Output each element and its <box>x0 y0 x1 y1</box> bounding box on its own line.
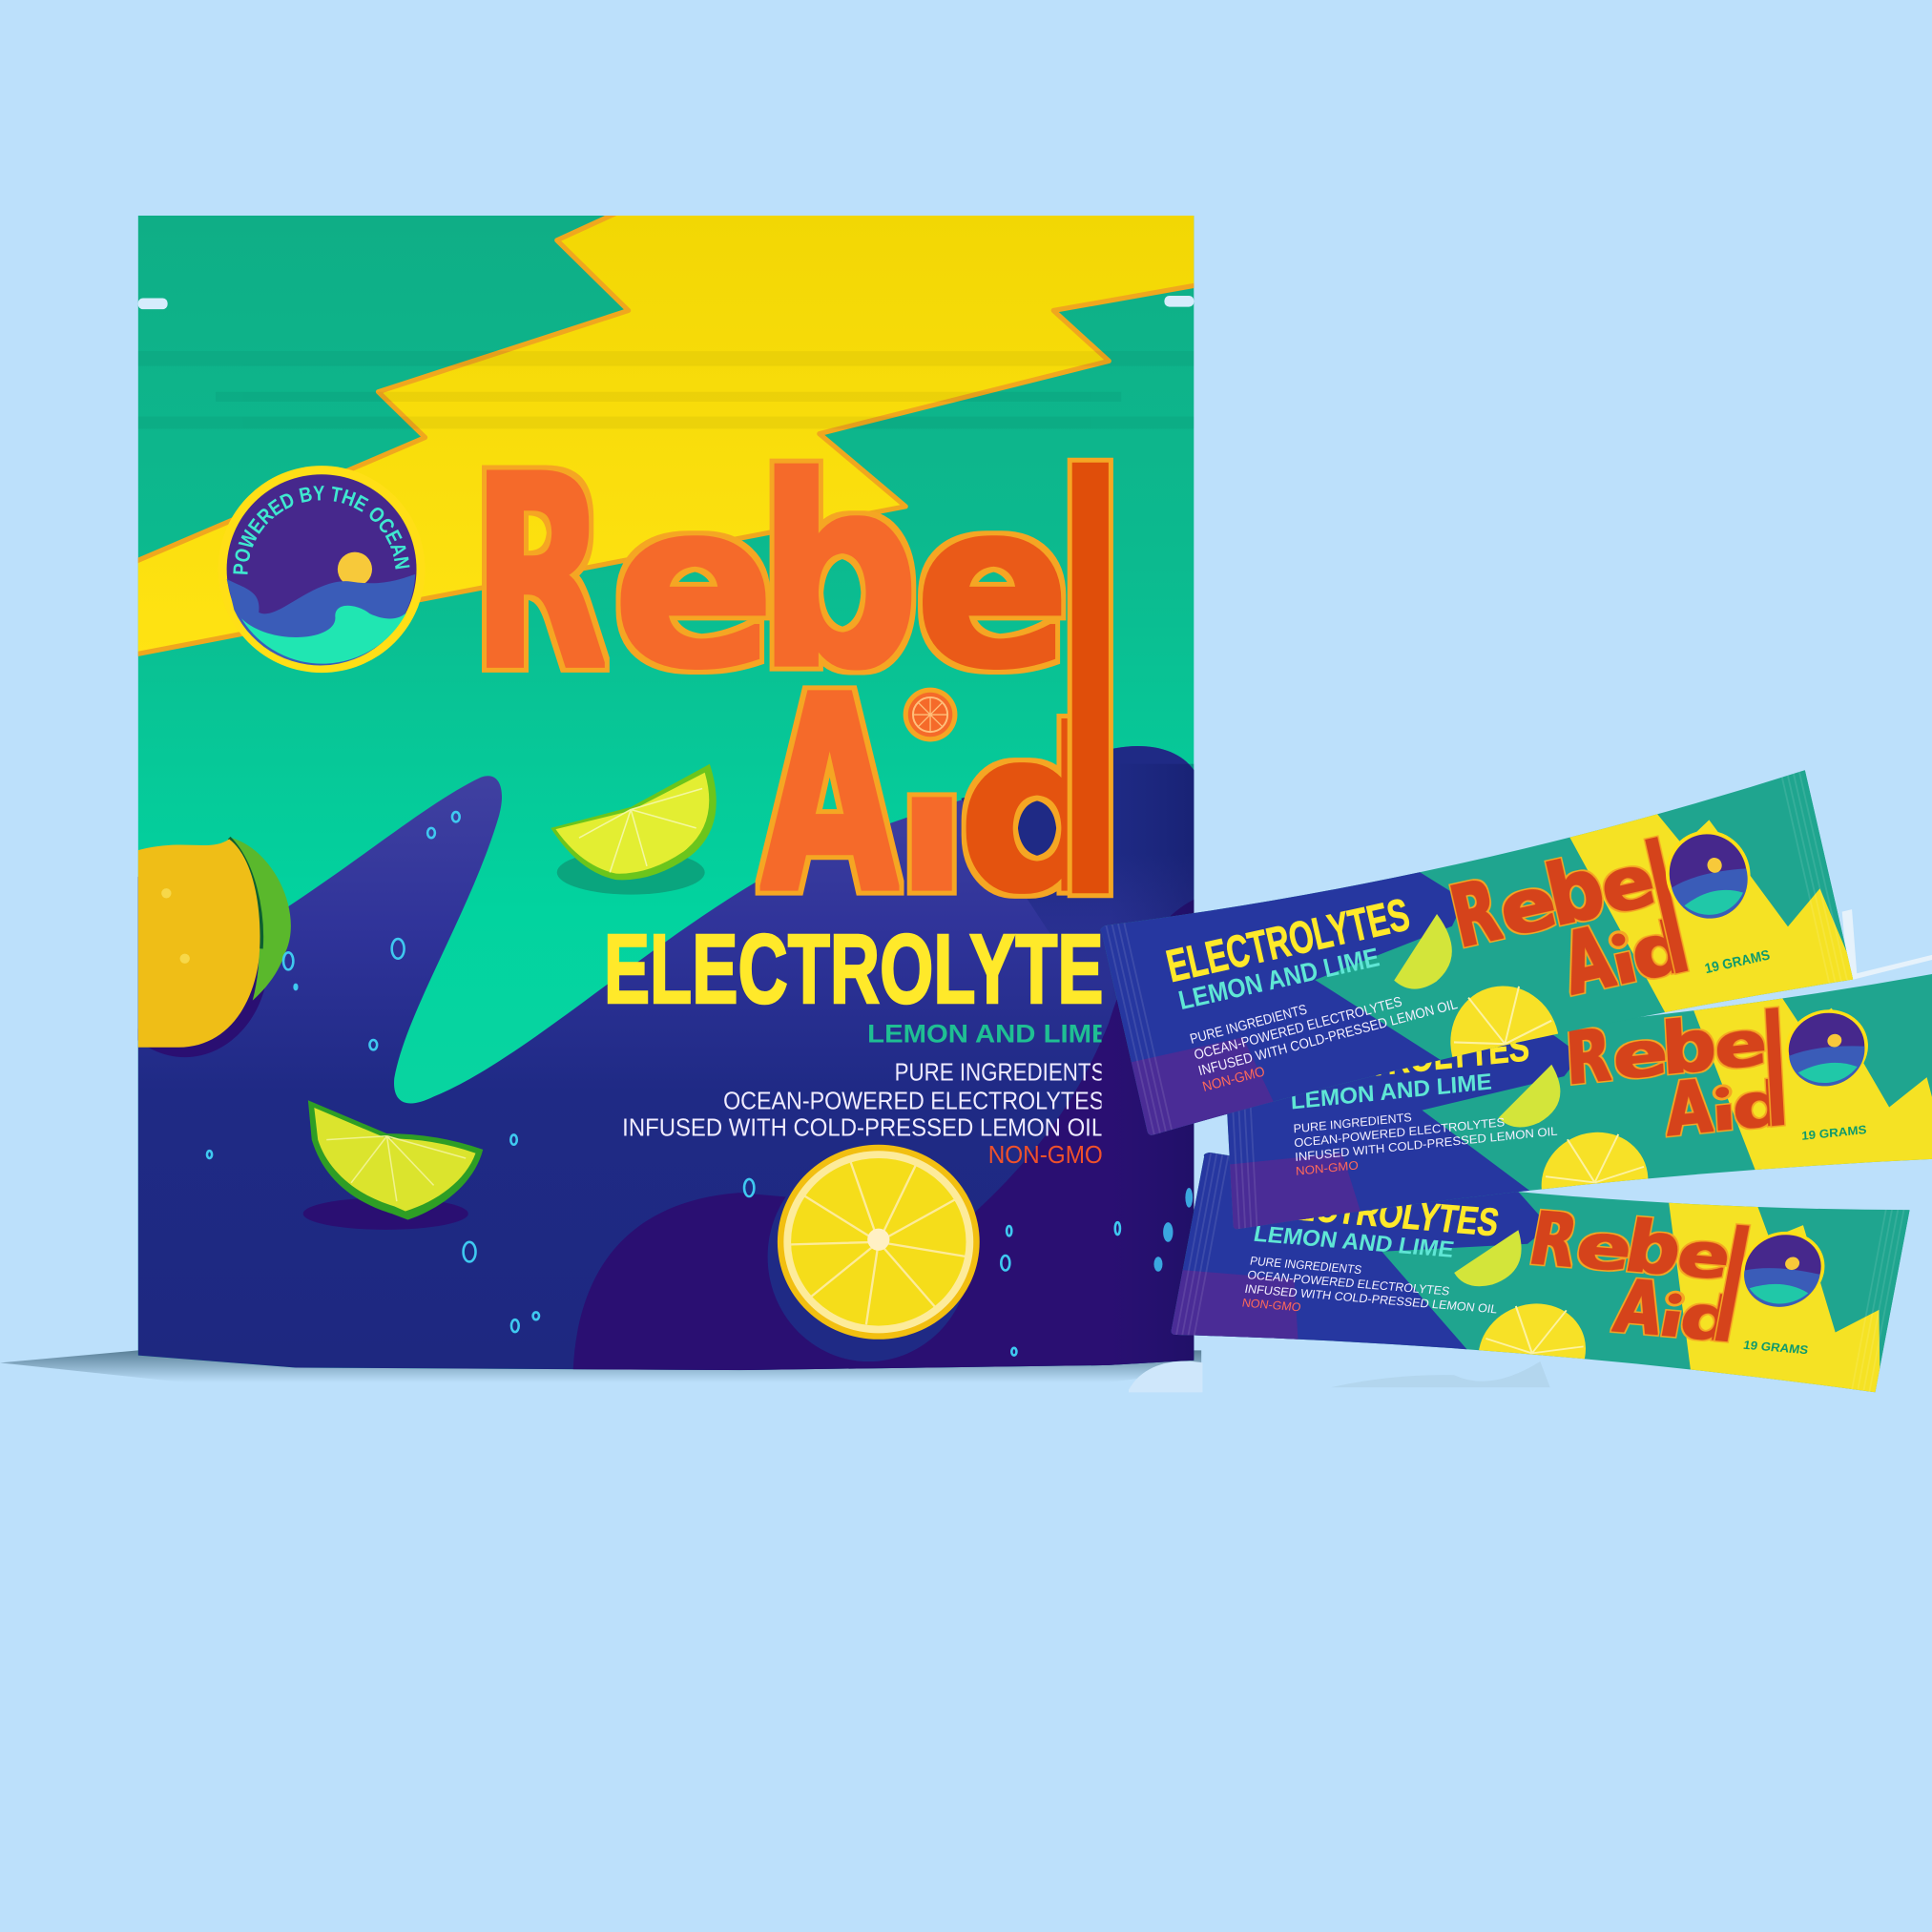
stick pack 3: INFUSED WITH COLD-PRESSED LEMON OIL <box>1243 1281 1499 1316</box>
logo: Rebel Aid: R <box>473 421 606 729</box>
stick pack 3 <box>1172 1153 1910 1393</box>
stick pack 2: PURE INGREDIENTS <box>1293 1111 1412 1135</box>
stick pack 1: INFUSED WITH COLD-PRESSED LEMON OIL <box>1196 997 1460 1079</box>
stick pack 2: e <box>1713 1008 1769 1084</box>
stick pack 1: OCEAN-POWERED ELECTROLYTES <box>1193 994 1403 1064</box>
stick pack 3: NON-GMO <box>1241 1296 1302 1314</box>
logo: Rebel Aid: i <box>897 738 966 927</box>
stick pack 2: e <box>1611 1016 1670 1093</box>
stick pack 1: 19 GRAMS <box>1703 947 1772 977</box>
stick pack 1: ELECTROLYTES <box>1162 888 1414 991</box>
stick pack 1: e <box>1491 860 1564 953</box>
badge: powered by the ocean <box>227 466 422 674</box>
stick pack 1: b <box>1537 839 1613 945</box>
ingredient lines <box>622 1060 1105 1169</box>
icon: orange slice dot <box>904 688 957 741</box>
stick pack 3: i <box>1655 1295 1688 1347</box>
stick pack 3: l <box>1704 1199 1758 1377</box>
stick pack 3: d <box>1674 1281 1743 1356</box>
stick pack 1 <box>1101 770 1853 1135</box>
ingredient lines: INFUSED WITH COLD-PRESSED LEMON OIL <box>622 1115 1104 1142</box>
stick pack 2: R <box>1564 1013 1613 1102</box>
whole lemon with leaf <box>137 837 291 1057</box>
ingredient lines: PURE INGREDIENTS <box>895 1060 1105 1087</box>
bottom light patches <box>1129 1361 1550 1392</box>
right side shading <box>1152 763 1195 1361</box>
hang holes <box>138 296 1194 309</box>
logo: Rebel Aid: d <box>958 684 1124 941</box>
stick pack 3: 19 GRAMS <box>1742 1338 1810 1357</box>
ingredient lines: NON-GMO <box>988 1142 1103 1169</box>
stick pack 2: OCEAN-POWERED ELECTROLYTES <box>1294 1115 1506 1150</box>
stick pack 2: l <box>1760 982 1791 1162</box>
logo: Rebel Aid: l <box>1059 371 1121 1023</box>
lime wedge lower <box>303 1100 483 1230</box>
yellow lightning bolt <box>123 213 1214 656</box>
pouch <box>101 213 1214 1374</box>
electrolytes heading: ELECTROLYTES <box>604 913 1150 1024</box>
dark purple blob <box>573 900 1194 1374</box>
stick pack 2: i <box>1711 1088 1737 1142</box>
logo: Rebel Aid: e <box>613 456 775 717</box>
stick pack 2: NON-GMO <box>1296 1158 1359 1178</box>
ingredient lines: OCEAN-POWERED ELECTROLYTES <box>723 1088 1104 1114</box>
stick pack 1: e <box>1592 838 1663 931</box>
water droplets <box>207 812 1120 1356</box>
stick pack 1: l <box>1634 807 1701 1014</box>
product description text <box>607 933 1102 1164</box>
pouch ground shadow <box>0 1350 1201 1382</box>
zipper seal bands <box>242 351 1111 429</box>
stick pack 2: 19 GRAMS <box>1801 1123 1867 1143</box>
flavour line: LEMON AND LIME <box>867 1019 1111 1049</box>
logo: Rebel Aid <box>473 371 1124 1023</box>
logo: Rebel Aid: e <box>915 455 1070 718</box>
stick pack 3: LEMON AND LIME <box>1252 1221 1456 1263</box>
stick pack 2 <box>1227 974 1932 1229</box>
stick pack 3: PURE INGREDIENTS <box>1249 1254 1363 1277</box>
stick pack 2: LEMON AND LIME <box>1290 1069 1492 1114</box>
stick pack 3: e <box>1570 1210 1638 1285</box>
logo: Rebel Aid: b <box>758 423 919 726</box>
stick pack 2: ELECTROLYTES <box>1286 1026 1530 1093</box>
badge: powered by the ocean: POWERED BY THE OCEAN <box>233 486 410 574</box>
stick pack 2: A <box>1664 1063 1714 1153</box>
outer droplets <box>1153 1188 1193 1272</box>
stick pack 1: LEMON AND LIME <box>1175 942 1382 1015</box>
stick pack 2: INFUSED WITH COLD-PRESSED LEMON OIL <box>1295 1124 1558 1164</box>
white wrapper edge <box>1842 909 1932 981</box>
stick pack 2: b <box>1659 1004 1718 1091</box>
navy hump right <box>961 746 1195 933</box>
stick pack 1: A <box>1554 908 1622 1015</box>
stick pack 3: b <box>1619 1205 1688 1292</box>
stick pack 1: R <box>1443 861 1508 966</box>
stick pack 1: i <box>1607 934 1643 997</box>
navy wave shape <box>138 746 1194 1374</box>
stick pack 3: ELECTROLYTES <box>1254 1182 1503 1245</box>
stick pack 1: PURE INGREDIENTS <box>1189 1002 1309 1048</box>
stick pack 3: OCEAN-POWERED ELECTROLYTES <box>1246 1268 1451 1298</box>
logo: Rebel Aid: A <box>761 640 898 953</box>
stick pack 3: e <box>1672 1218 1736 1294</box>
lemon slice <box>768 1145 980 1361</box>
stick pack 2: d <box>1731 1068 1790 1144</box>
stick pack 3: R <box>1524 1197 1584 1284</box>
lime wedge upper <box>551 764 717 895</box>
stick pack 1: NON-GMO <box>1201 1064 1267 1095</box>
stick pack 1: d <box>1623 905 1696 997</box>
stick pack 3: A <box>1609 1263 1670 1352</box>
